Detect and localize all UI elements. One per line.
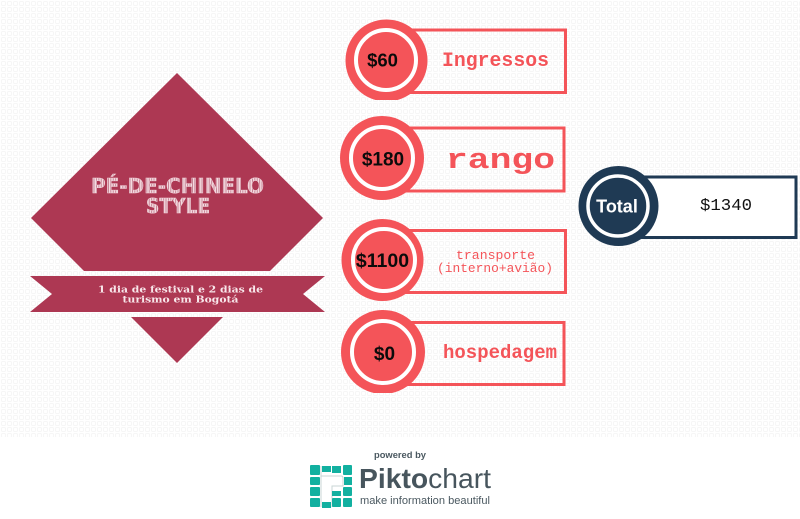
item: rango: $180 — [362, 150, 404, 170]
powered by: powered by — [374, 450, 427, 461]
item: transporte: $1100 — [356, 250, 409, 272]
title: PÉ-DE-CHINELO — [91, 174, 264, 198]
price badge — [340, 116, 424, 200]
wordmark: Piktochart — [359, 463, 491, 494]
label: transporte — [456, 248, 535, 263]
price badge — [346, 20, 428, 102]
diamond shape — [31, 73, 323, 271]
item: total — [578, 166, 796, 246]
footer: powered by Piktochart — [310, 450, 491, 508]
label: hospedagem — [443, 342, 557, 364]
title: STYLE — [146, 194, 210, 218]
label: rango — [446, 144, 555, 177]
label box — [400, 128, 564, 191]
label box — [400, 30, 566, 92]
label: Ingressos — [442, 50, 549, 73]
item: transporte — [342, 219, 566, 301]
lower triangle — [131, 317, 223, 363]
ribbon text: turismo em Bogotá — [122, 294, 239, 306]
item: total: Total — [596, 196, 638, 216]
label box — [636, 177, 796, 238]
label box — [400, 230, 566, 292]
ribbon text: 1 dia de festival e 2 dias de — [98, 286, 263, 296]
ribbon — [30, 276, 325, 312]
icon: Piktochart logo — [310, 465, 352, 508]
tagline: make information beautiful — [360, 495, 490, 507]
total badge — [578, 166, 658, 246]
item: ingressos — [346, 20, 566, 102]
price badge: $60 — [367, 50, 398, 70]
price badge: $0 — [374, 344, 395, 365]
price badge — [342, 219, 424, 301]
total value: $1340 — [700, 196, 752, 215]
item: rango — [340, 116, 564, 200]
panel: diamond banner — [30, 73, 325, 363]
label box — [400, 322, 564, 384]
price badge — [341, 310, 425, 394]
item: hospedagem — [341, 310, 564, 394]
label: (interno+avião) — [437, 261, 553, 276]
